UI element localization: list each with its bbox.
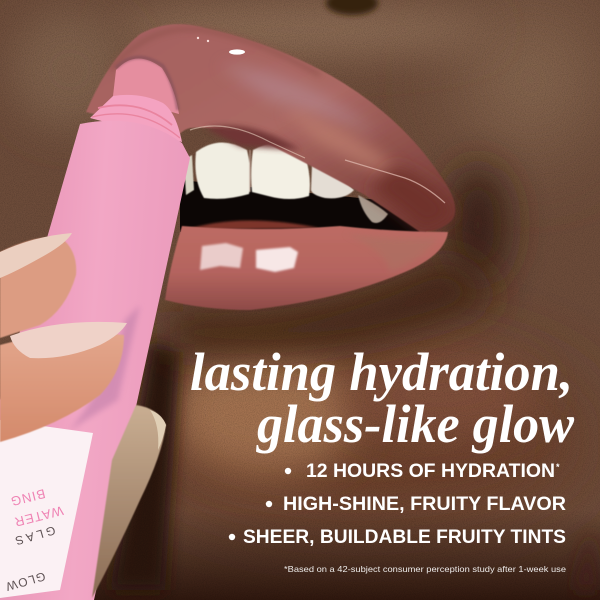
mouth interior [180, 180, 430, 240]
title: glass-like glow [256, 394, 575, 454]
footnote: *Based on a 42-subject consumer perception study after 1-week use [284, 564, 566, 574]
lip highlight [229, 49, 245, 55]
label text [3, 486, 65, 594]
label text: GLOW [3, 569, 47, 594]
benefits list [229, 461, 566, 548]
body [0, 121, 190, 600]
label text: GLAS [11, 523, 57, 549]
benefits list: * [556, 462, 560, 472]
upper lip [86, 24, 456, 232]
lip gloss highlights [200, 243, 298, 272]
title [190, 342, 575, 454]
inner tongue [185, 220, 320, 230]
label text: WATER [12, 503, 65, 530]
fingers [0, 233, 127, 442]
nostril [326, 0, 378, 15]
index fingertip [0, 237, 76, 338]
benefits list: 12 HOURS OF HYDRATION [306, 461, 555, 482]
applicator tip in lip [113, 57, 179, 114]
label text: BING [9, 486, 47, 509]
lip balm tube [0, 95, 190, 600]
label [0, 420, 93, 598]
thumb behind tube [92, 405, 166, 598]
benefits list: SHEER, BUILDABLE FRUITY TINTS [243, 527, 566, 548]
teeth [184, 142, 388, 223]
middle finger [0, 333, 124, 442]
benefits list: HIGH-SHINE, FRUITY FLAVOR [283, 494, 566, 515]
nail [0, 233, 72, 278]
collar [90, 95, 182, 142]
shadow under finger [70, 305, 140, 430]
title: lasting hydration, [190, 342, 573, 402]
lower lip [165, 226, 448, 310]
nail [10, 322, 127, 358]
